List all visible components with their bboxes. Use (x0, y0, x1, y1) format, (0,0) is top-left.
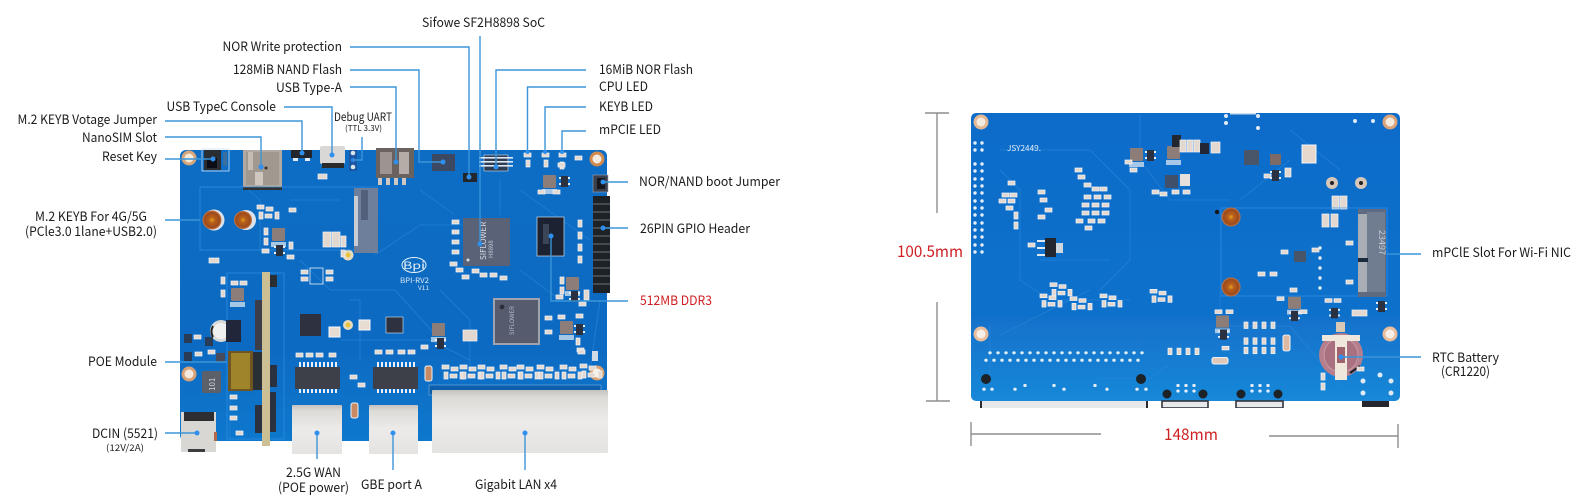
label: DDR3: 512MB DDR3 (640, 290, 712, 309)
label: GPIO: 26PIN GPIO Header (640, 218, 751, 237)
label: NanoSIM: NanoSIM Slot (82, 127, 157, 146)
mPCIe slot zone (1215, 208, 1389, 297)
boot jumper (593, 175, 608, 192)
DC jack (181, 412, 217, 452)
RTC battery holder (1319, 301, 1394, 396)
photo: front of board (180, 146, 610, 454)
label: DC in: (12V/2A) (106, 441, 144, 454)
SoC chip: SIFLOWER (478, 222, 489, 260)
transformers and switch ICs (295, 314, 446, 418)
QFP controller: SIFLOWER (507, 306, 516, 335)
small SOIC outline (301, 268, 333, 284)
Bpi logo: Bpi (403, 257, 425, 272)
label: M.2 jumper: M.2 KEYB Votage Jumper (18, 109, 158, 128)
leader: NOR write protection (350, 47, 469, 177)
silkscreen batch: JSY2449. (1007, 143, 1041, 154)
label: debug UART (334, 109, 392, 134)
parts center via cluster (1075, 168, 1111, 230)
GBE port (369, 405, 418, 454)
POE module (184, 272, 284, 446)
leader: KEYB LED (545, 107, 586, 152)
leader: NanoSIM (165, 137, 261, 167)
leader: USB TypeC console (284, 107, 332, 155)
pcb: front (180, 150, 607, 441)
label: reset key: Reset Key (102, 146, 157, 165)
SoC chip (463, 218, 510, 266)
label: M.2 4G/5G (25, 206, 157, 240)
leader: NOR flash (496, 70, 586, 167)
LED row above LAN (442, 364, 602, 379)
label: POE: POE Module (88, 351, 157, 370)
label: debug UART: Debug UART (334, 109, 392, 125)
label: RTC: RTC Battery (1432, 347, 1499, 366)
pcb: back (971, 113, 1400, 401)
leader: GBE (392, 433, 394, 470)
LEDs (524, 153, 582, 169)
label: WAN (278, 462, 349, 496)
label: DC in: DCIN (5521) (92, 423, 158, 442)
DDR3 chip (537, 217, 564, 256)
leader: M.2 4G/5G (165, 219, 200, 221)
power parts top (1125, 135, 1220, 196)
debug header (349, 150, 357, 171)
label: USB TypeC console: USB TypeC Console (166, 96, 276, 115)
leader: M.2 jumper (165, 121, 302, 153)
USB TypeC (318, 146, 345, 179)
label: NOR flash: 16MiB NOR Flash (599, 59, 693, 78)
2.5G WAN port (292, 405, 342, 454)
label: mPCIE LED: mPCIE LED (599, 119, 661, 138)
marker dots (194, 150, 1344, 436)
label: WAN: 2.5G WAN (286, 462, 341, 481)
Bpi logo: BPI-RV2 (400, 275, 429, 286)
NOR flash chip (479, 155, 513, 171)
QFP controller (493, 298, 540, 345)
lower mid parts (1040, 283, 1341, 364)
SoC chip: H8898 (486, 240, 495, 258)
label: SoC: Sifowe SF2H8898 SoC (422, 12, 545, 31)
label: CPU LED: CPU LED (599, 76, 648, 95)
leader: DC in (165, 432, 197, 434)
leader lines: front board (165, 36, 1421, 470)
leader: mPCIe slot (1387, 253, 1421, 255)
mounting holes (182, 150, 604, 382)
label: NOR write protection: NOR Write protection (222, 36, 342, 55)
leader: LAN (524, 433, 526, 470)
label: LAN: Gigabit LAN x4 (475, 474, 557, 493)
mPCIe slot zone: 23497 (1376, 230, 1389, 255)
leader: NAND flash (350, 70, 443, 162)
parts around QFP (463, 314, 598, 361)
regulator (1028, 238, 1063, 257)
LAN x4 port (429, 385, 608, 453)
label: GBE: GBE port A (361, 474, 422, 493)
leader: boot jumper (603, 181, 628, 183)
reset key (202, 149, 229, 171)
leader: RTC (1341, 356, 1421, 358)
parts left cluster (999, 181, 1052, 229)
nanoSIM slot (243, 150, 282, 190)
label: DC in (92, 423, 158, 454)
buck converter parts top right (538, 163, 570, 194)
mounting holes (974, 114, 1398, 342)
POE module: 101 (207, 378, 218, 391)
leader: mPCIE LED (562, 131, 586, 152)
LAN pin rows (982, 351, 1270, 393)
M.2 4G/5G zone (200, 187, 378, 253)
label: WAN: (POE power) (278, 477, 349, 496)
jumper (291, 150, 312, 161)
through holes (981, 374, 1282, 398)
connector tails (980, 401, 1389, 408)
label: M.2 4G/5G: (PCle3.0 1lane+USB2.0) (25, 221, 157, 240)
GPIO pin vias (973, 141, 984, 254)
label: RTC: (CR1220) (1441, 361, 1490, 380)
label: mPCIe slot: mPClE Slot For Wi-Fi NIC (1432, 242, 1571, 261)
leader: DDR3 (551, 236, 628, 301)
leader: reset key (165, 158, 213, 160)
label: debug UART: (TTL 3.3V) (345, 123, 382, 134)
leader: POE (165, 361, 227, 363)
Bpi logo: V11 (418, 283, 429, 292)
leader: USB Type-A (350, 87, 396, 162)
label: boot jumper: NOR/NAND boot Jumper (639, 171, 781, 190)
photo: back of board (971, 113, 1400, 408)
label: RTC (1432, 347, 1499, 380)
label: NAND flash: 128MiB NAND Flash (233, 59, 342, 78)
26 pin GPIO header (593, 196, 610, 293)
dimension: height (897, 113, 963, 401)
label: M.2 4G/5G: M.2 KEYB For 4G/5G (35, 206, 147, 225)
leader: debug UART (353, 137, 362, 160)
NOR jumper (463, 173, 477, 182)
USB Type-A (376, 148, 414, 185)
dimension: width: 148mm (1164, 421, 1218, 445)
small parts under SIM (209, 205, 346, 263)
label: KEYB LED: KEYB LED (599, 96, 653, 115)
leader: CPU LED (528, 87, 586, 152)
leader: WAN (316, 433, 318, 459)
label: USB Type-A: USB Type-A (276, 77, 342, 96)
parts around SoC (450, 220, 507, 280)
leader: SoC (479, 36, 481, 244)
dimension: height: 100.5mm (897, 238, 963, 262)
NAND chip (432, 154, 455, 171)
DDR side parts (556, 220, 589, 306)
leader: GPIO (603, 227, 628, 229)
right top parts (1224, 113, 1375, 227)
dimension: width (971, 421, 1398, 448)
Bpi logo (400, 257, 429, 292)
